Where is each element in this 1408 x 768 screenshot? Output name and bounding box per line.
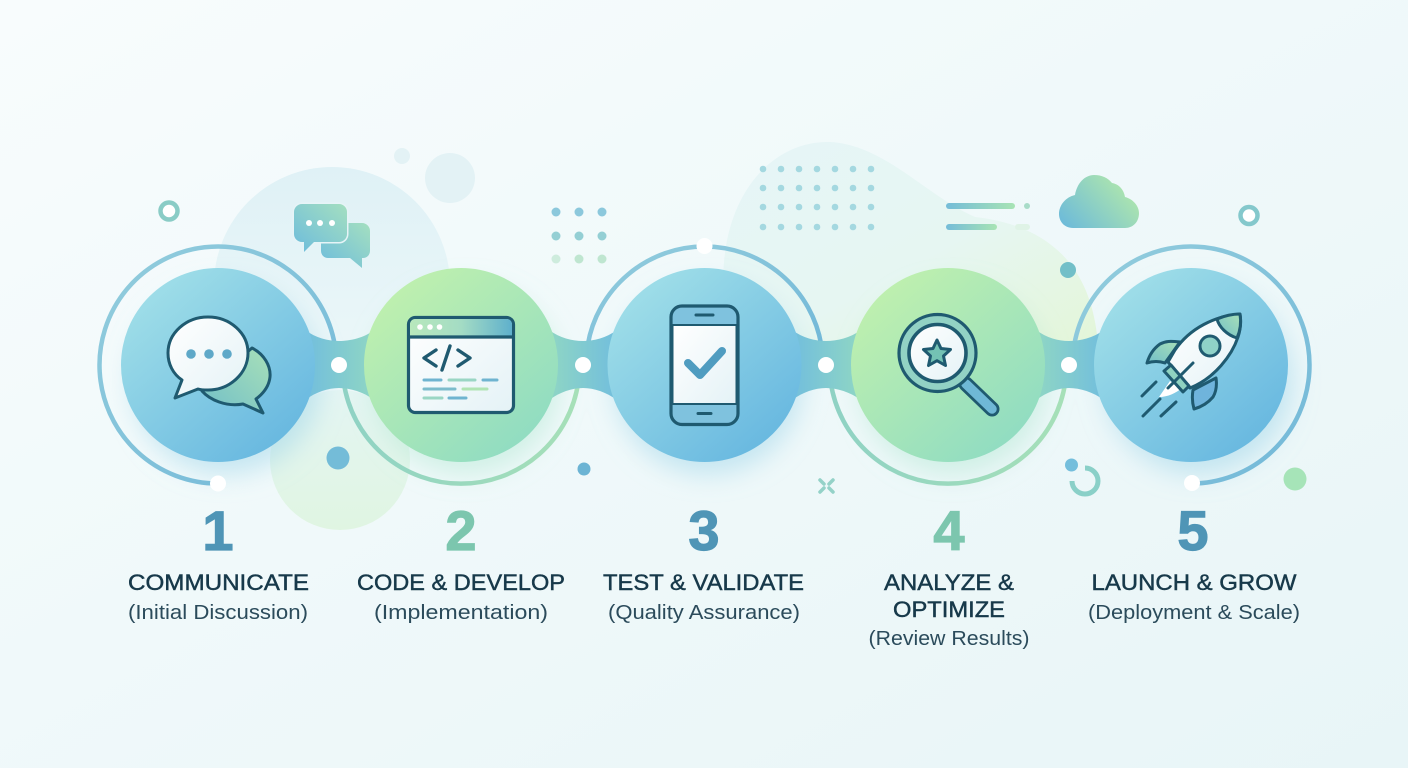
number 3: 3 [688,499,720,562]
decoration: pale circles top [394,148,475,203]
title 5: LAUNCH & GROW [1092,570,1297,595]
step 2 label [357,499,565,624]
decoration: spinner [1065,458,1098,494]
title 4 line 2: OPTIMIZE [893,597,1005,622]
number 1: 1 [202,499,234,562]
icon: magnifier with star [899,314,992,409]
circle shadows [132,286,1292,474]
step 3 label [603,499,804,624]
icon: chat bubbles [168,317,270,413]
background blob: left circle [214,167,450,403]
connector 4-5 [1036,330,1104,400]
subtitle 4: (Review Results) [868,628,1030,650]
background blob: lower green circle [270,390,410,530]
decoration: dot grid large [760,166,874,230]
connector 3-4 [792,330,861,400]
step 4 label [868,499,1030,650]
number 5: 5 [1177,499,1209,562]
subtitle 5: (Deployment & Scale) [1088,602,1300,624]
connector 2-3 [549,330,617,400]
decoration: dot grid small [552,208,606,264]
small chat icon [294,204,370,268]
decoration: text lines [946,203,1030,230]
ring 2 [344,382,578,484]
subtitle 2: (Implementation) [374,602,548,624]
step 1 circle [121,268,315,462]
icon: code window [408,318,514,412]
ring 4 [831,382,1065,484]
connector 1-2 [305,330,374,400]
step 5 label [1088,499,1300,624]
number 2: 2 [445,499,477,562]
subtitle 3: (Quality Assurance) [608,602,800,624]
title 2: CODE & DEVELOP [357,570,565,595]
icon: cloud [1059,175,1139,228]
subtitle 1: (Initial Discussion) [128,602,308,624]
ring 1 [99,246,335,484]
title 4 line 1: ANALYZE & [884,570,1014,595]
step 5 circle [1094,268,1288,462]
step 2 circle [364,268,558,462]
icon: phone with check [671,306,738,424]
title 3: TEST & VALIDATE [603,570,804,595]
decoration: ring top right [1240,207,1258,224]
node dots [210,238,1200,492]
step 1 label [128,499,309,624]
decoration: ring top left [160,202,178,220]
ring 5 [1074,246,1309,484]
step 4 circle [851,268,1045,462]
icon: rocket [1142,314,1241,416]
decoration: x mark [820,480,833,492]
title 1: COMMUNICATE [128,570,309,595]
background blob: right organic shape [723,142,1098,345]
ring 3 [588,247,821,345]
step 3 circle [608,268,802,462]
number 4: 4 [933,499,965,562]
decoration: scattered dots [326,262,1306,490]
